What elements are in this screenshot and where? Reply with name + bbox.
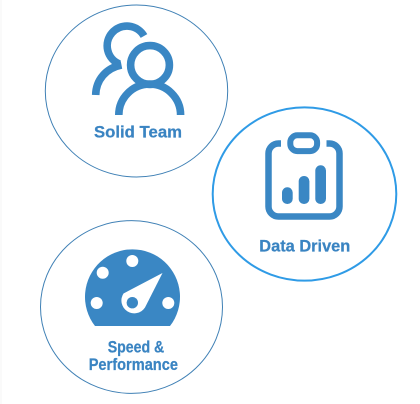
panel: solid team — [45, 5, 228, 177]
icon: clipboard chart — [268, 135, 340, 216]
panel: speed and performance — [40, 221, 222, 393]
panel: data driven — [213, 107, 396, 281]
label: data driven: Data Driven — [259, 238, 350, 256]
label: solid team: Solid Team — [94, 123, 182, 141]
label: speed and performance — [89, 338, 178, 374]
label: speed and performance: Speed & — [108, 338, 164, 356]
label: speed and performance: Performance — [89, 356, 178, 374]
icon: gauge — [85, 249, 180, 326]
icon: two people — [96, 26, 181, 115]
